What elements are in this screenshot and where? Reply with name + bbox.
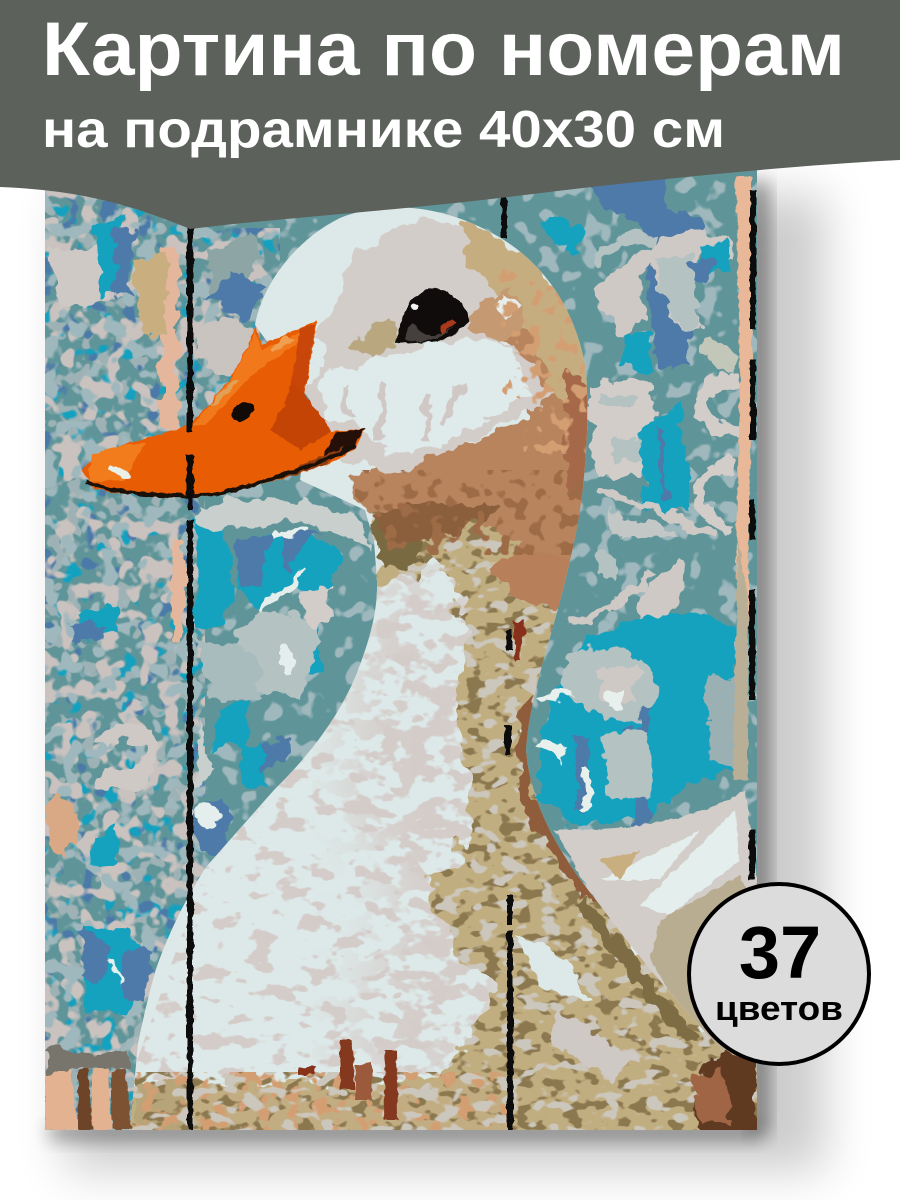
painting background base [45, 170, 757, 1130]
sparse flecks across all background [45, 170, 757, 1130]
panel gap lines [190, 170, 753, 1130]
middle panel ornament [193, 230, 372, 854]
badge number: 37 [739, 911, 821, 994]
wing feathers [555, 790, 757, 1095]
header banner [0, 0, 900, 229]
right panel ornament [535, 176, 745, 850]
background texture on grey panels [45, 190, 280, 1130]
duck head detail: beak [82, 320, 365, 496]
neck streaks [375, 480, 700, 1080]
duck textures [130, 216, 757, 1130]
neck and side tan [130, 478, 757, 1130]
duck body silhouette [130, 208, 757, 1130]
duck eye [396, 288, 470, 344]
painting: duck on patterned wood panels [30, 170, 770, 1150]
canvas drop shadow [50, 182, 825, 1170]
badge caption: цветов [715, 990, 843, 1028]
body grey blotches [134, 562, 498, 1082]
right edge peach stripe [733, 176, 752, 780]
bottom rusty wood strip [45, 1040, 757, 1135]
head brown and orange flecks [370, 505, 500, 545]
subtitle: на подрамнике 40х30 см [42, 101, 725, 159]
badge: 37 colours [689, 884, 869, 1064]
left panel ornament [43, 215, 184, 1015]
title: Картина по номерам [42, 7, 845, 92]
head tones [300, 218, 595, 560]
